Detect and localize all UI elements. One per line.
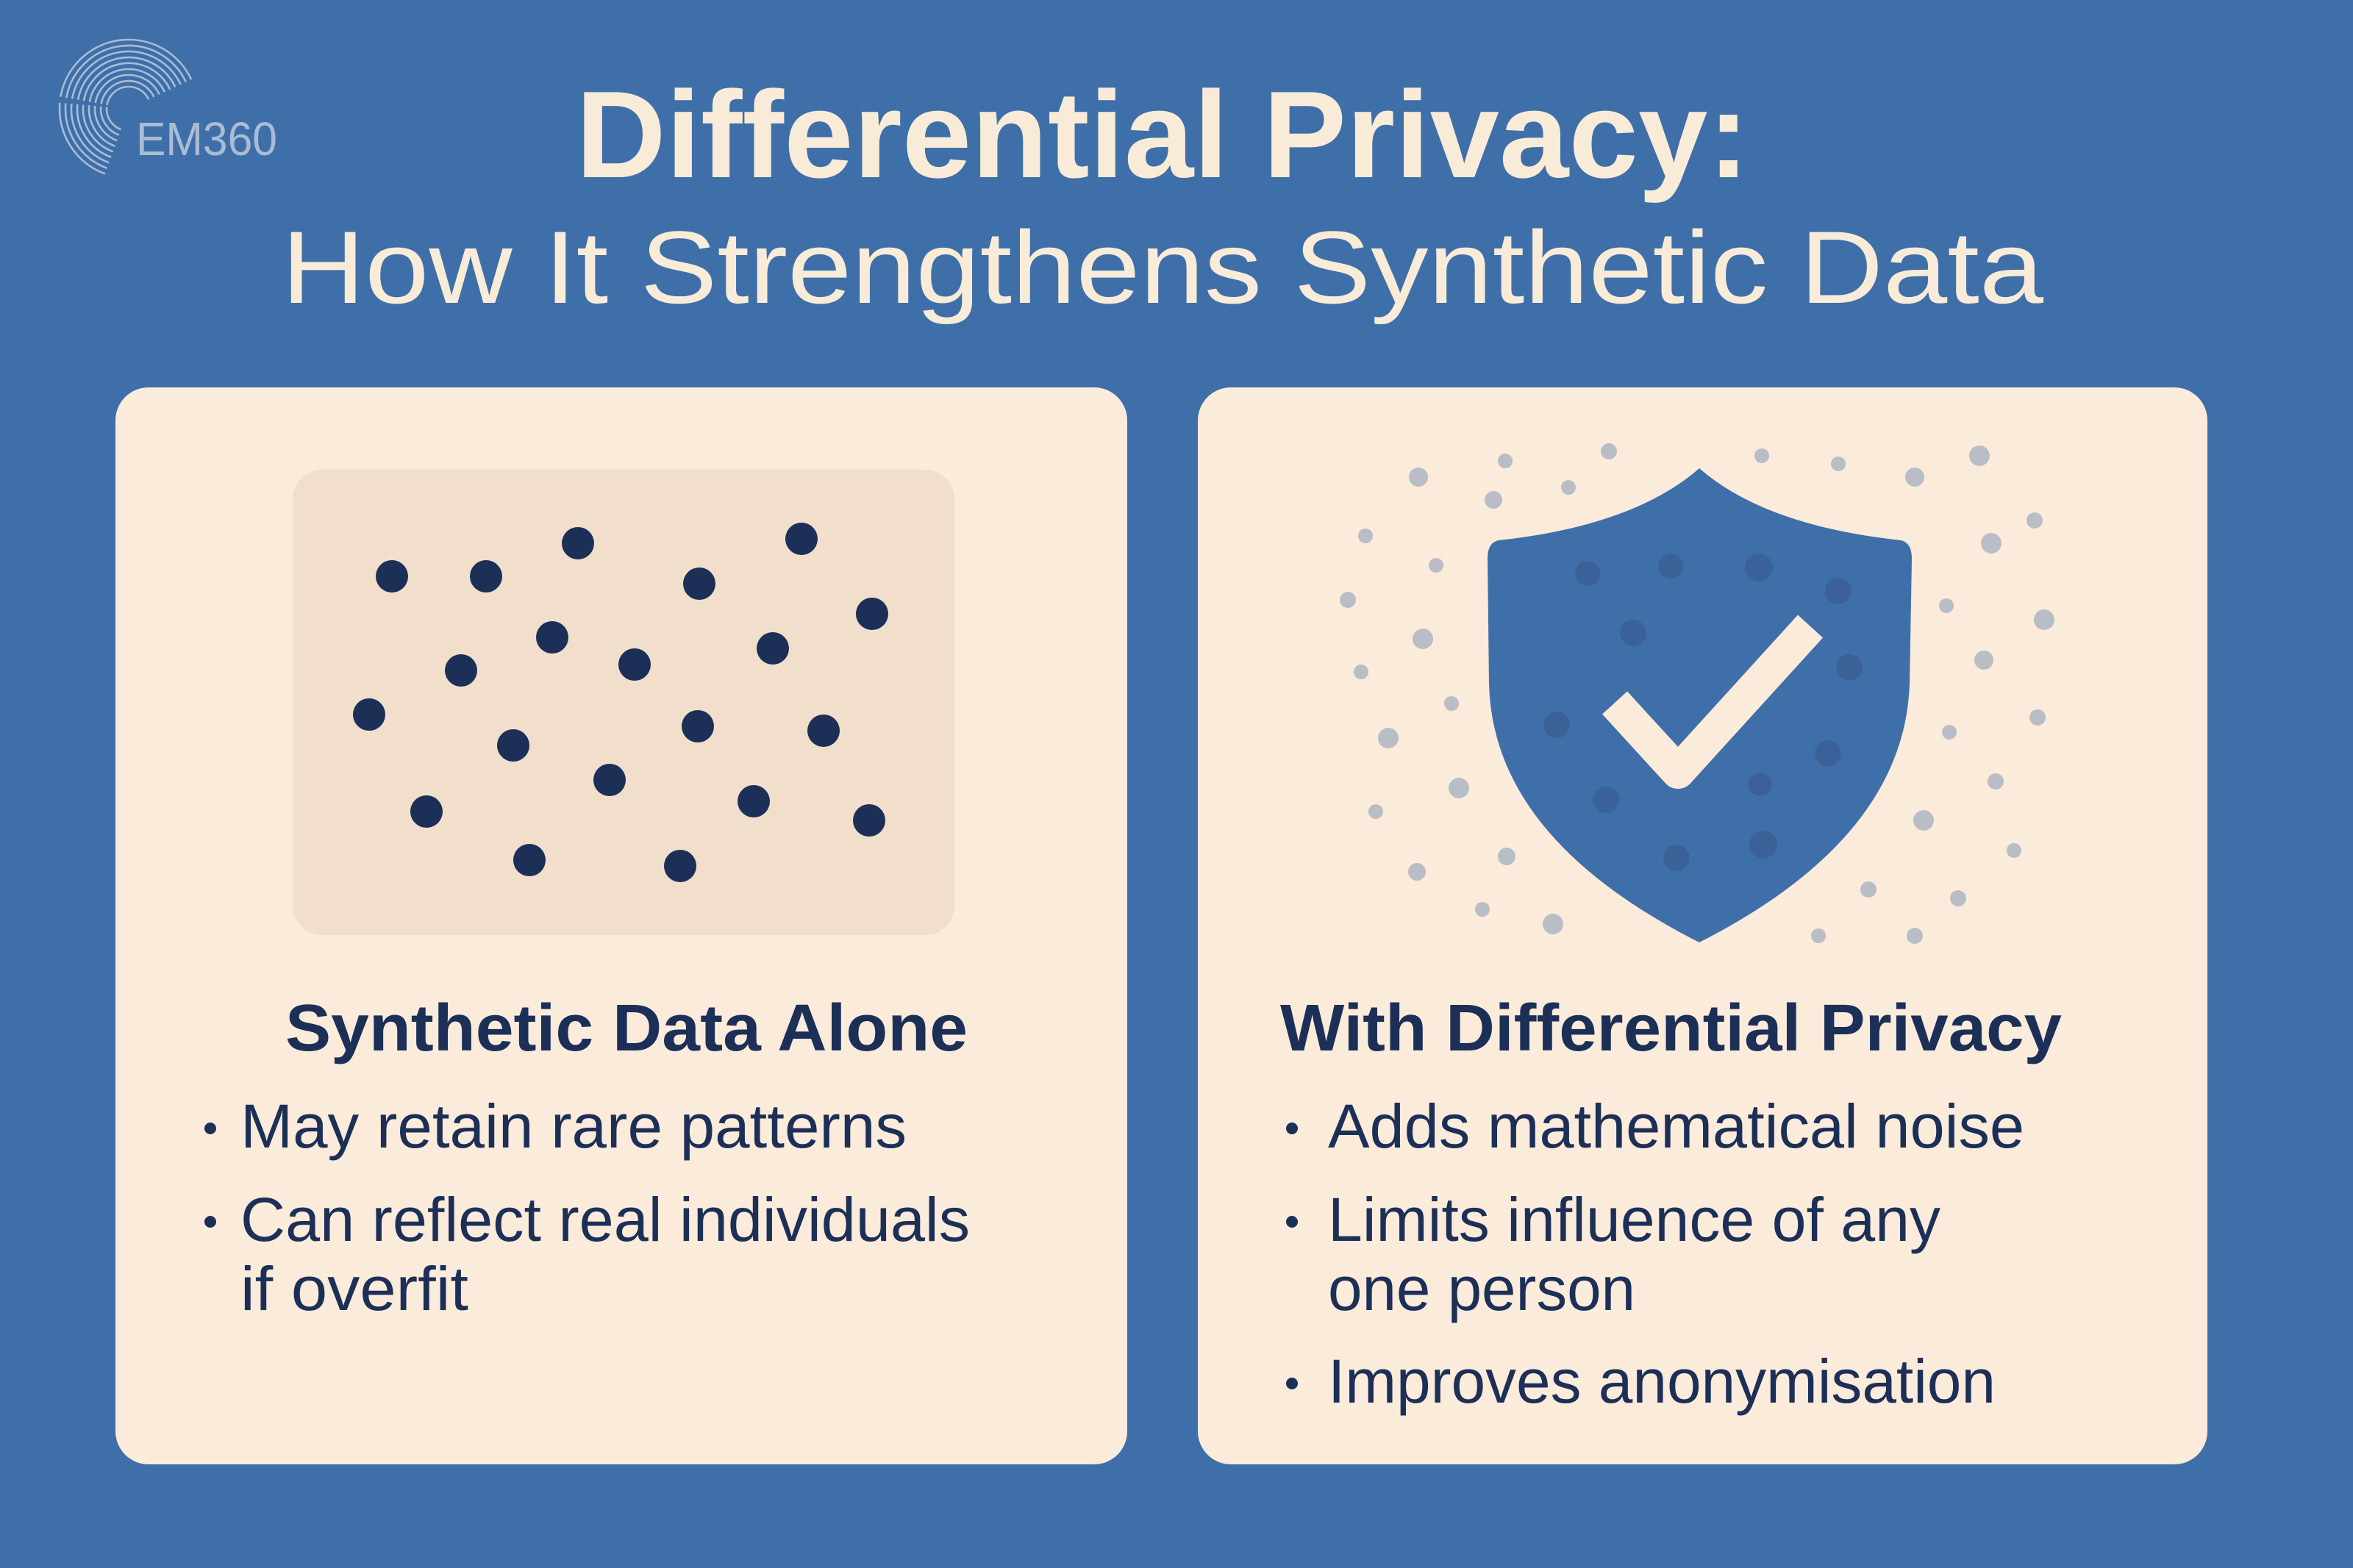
panel: with differential privacy (1198, 387, 2207, 1464)
bullet list: right: Adds mathematical noise (1328, 1092, 2024, 1161)
bullet list: left: Can reflect real individuals (240, 1185, 970, 1254)
bullet list: right: Improves anonymisation (1328, 1347, 1996, 1416)
bullet list: right: Limits influence of any (1328, 1185, 1940, 1254)
heading: With Differential Privacy: With Differential Privacy (1280, 992, 2062, 1065)
title: How It Strengthens Synthetic Data (282, 210, 2043, 325)
bullet list: right: one person (1328, 1254, 1635, 1323)
bullet list: left: if overfit (240, 1254, 468, 1323)
icon: shield with checkmark (1488, 468, 1912, 942)
panel: synthetic data alone (115, 387, 1127, 1464)
bullet list: left: May retain rare patterns (240, 1092, 907, 1161)
heading: Synthetic Data Alone: Synthetic Data Alone (285, 992, 968, 1065)
bullet list: left (204, 1092, 970, 1323)
title: Differential Privacy: (576, 65, 1749, 204)
logo: EM360: EM360 (136, 112, 277, 165)
title (282, 65, 2043, 325)
noise dots (1340, 443, 2054, 944)
bullet list: right (1286, 1092, 2024, 1416)
scatter plot of data points (293, 470, 954, 935)
logo: EM360 (60, 40, 277, 173)
